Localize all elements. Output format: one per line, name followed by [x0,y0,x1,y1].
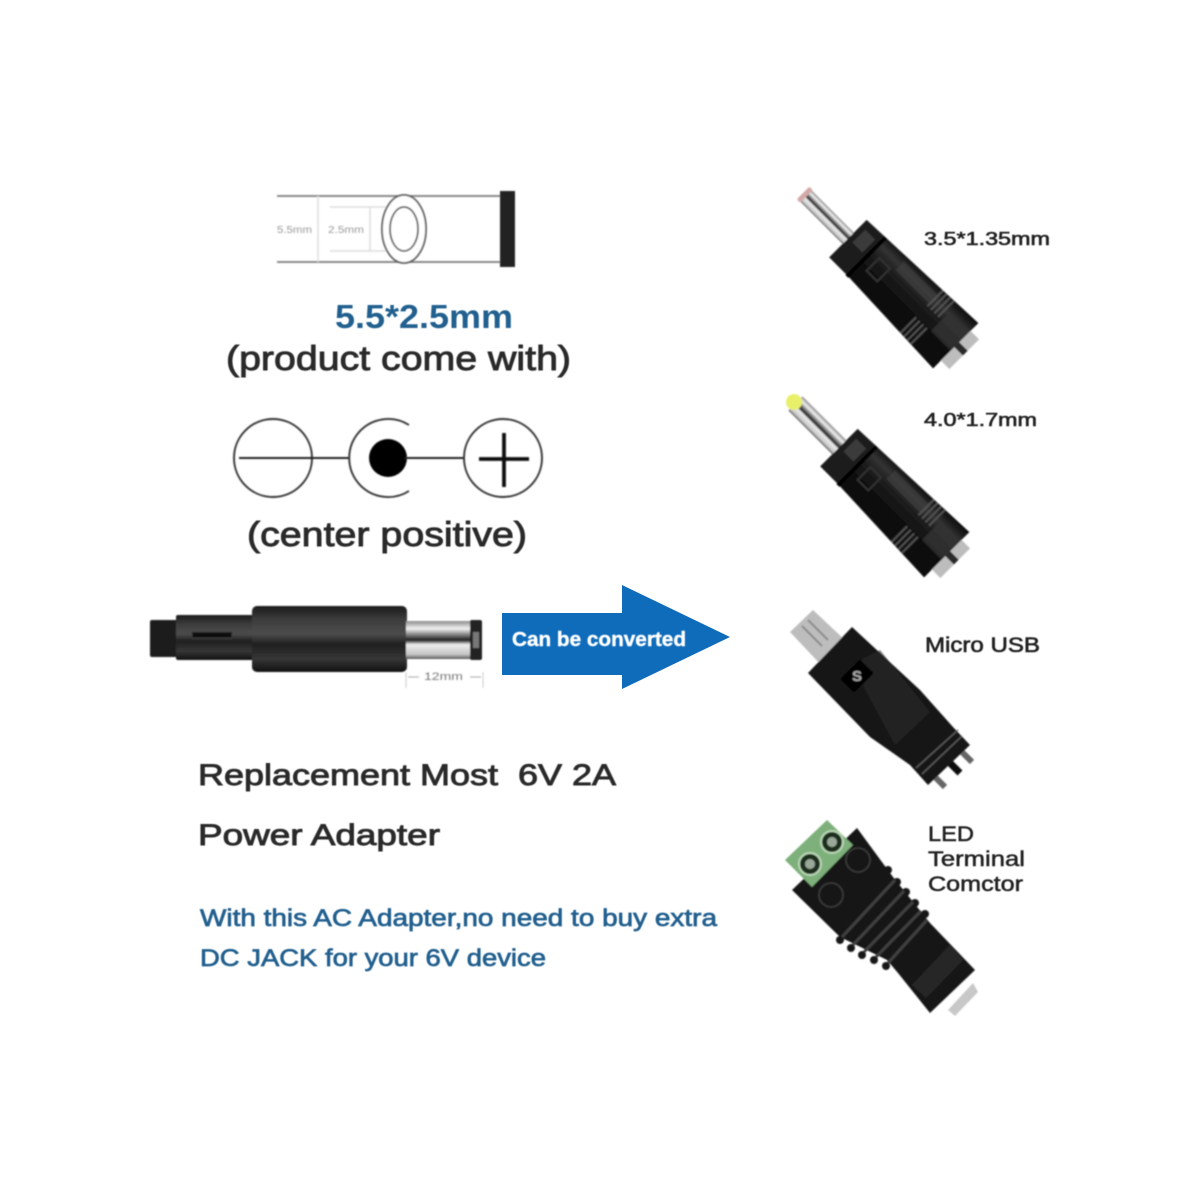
label: 4.0x1.7mm: 4.0*1.7mm [924,410,1037,430]
DC plug and cable [150,606,483,688]
label: LED terminal connector [928,823,1025,896]
plug dimension diagram [277,191,515,267]
adapter: 4.0x1.7mm [766,374,978,586]
product come with note: (product come with) [226,340,571,378]
label: LED terminal connector: LED [928,823,974,846]
blue description [200,905,718,972]
label: 3.5x1.35mm: 3.5*1.35mm [924,229,1050,249]
conversion arrow [502,585,730,689]
plug dimension diagram: 5.5mm [277,225,312,236]
label: micro USB: Micro USB [925,634,1040,657]
replacement heading: Replacement Most 6V 2A [198,759,616,792]
DC plug and cable: 12mm [424,671,463,683]
blue description: DC JACK for your 6V device [200,945,546,972]
adapter: 3.5x1.35mm [780,170,987,377]
plug dimension diagram: 2.5mm [328,225,364,236]
blue description: With this AC Adapter,no need to buy extra [200,905,718,932]
polarity symbol [234,419,542,497]
replacement heading: Power Adapter [198,819,440,852]
adapter: micro USB [790,610,972,787]
adapter: LED terminal connector [785,820,978,1016]
replacement heading [198,759,616,852]
center positive note: (center positive) [247,516,527,554]
conversion arrow: Can be converted [512,628,686,651]
adapter: micro USB: S [852,668,862,685]
label: LED terminal connector: Terminal [928,848,1025,871]
size heading: 5.5*2.5mm [335,298,513,335]
label: LED terminal connector: Comctor [928,873,1023,896]
